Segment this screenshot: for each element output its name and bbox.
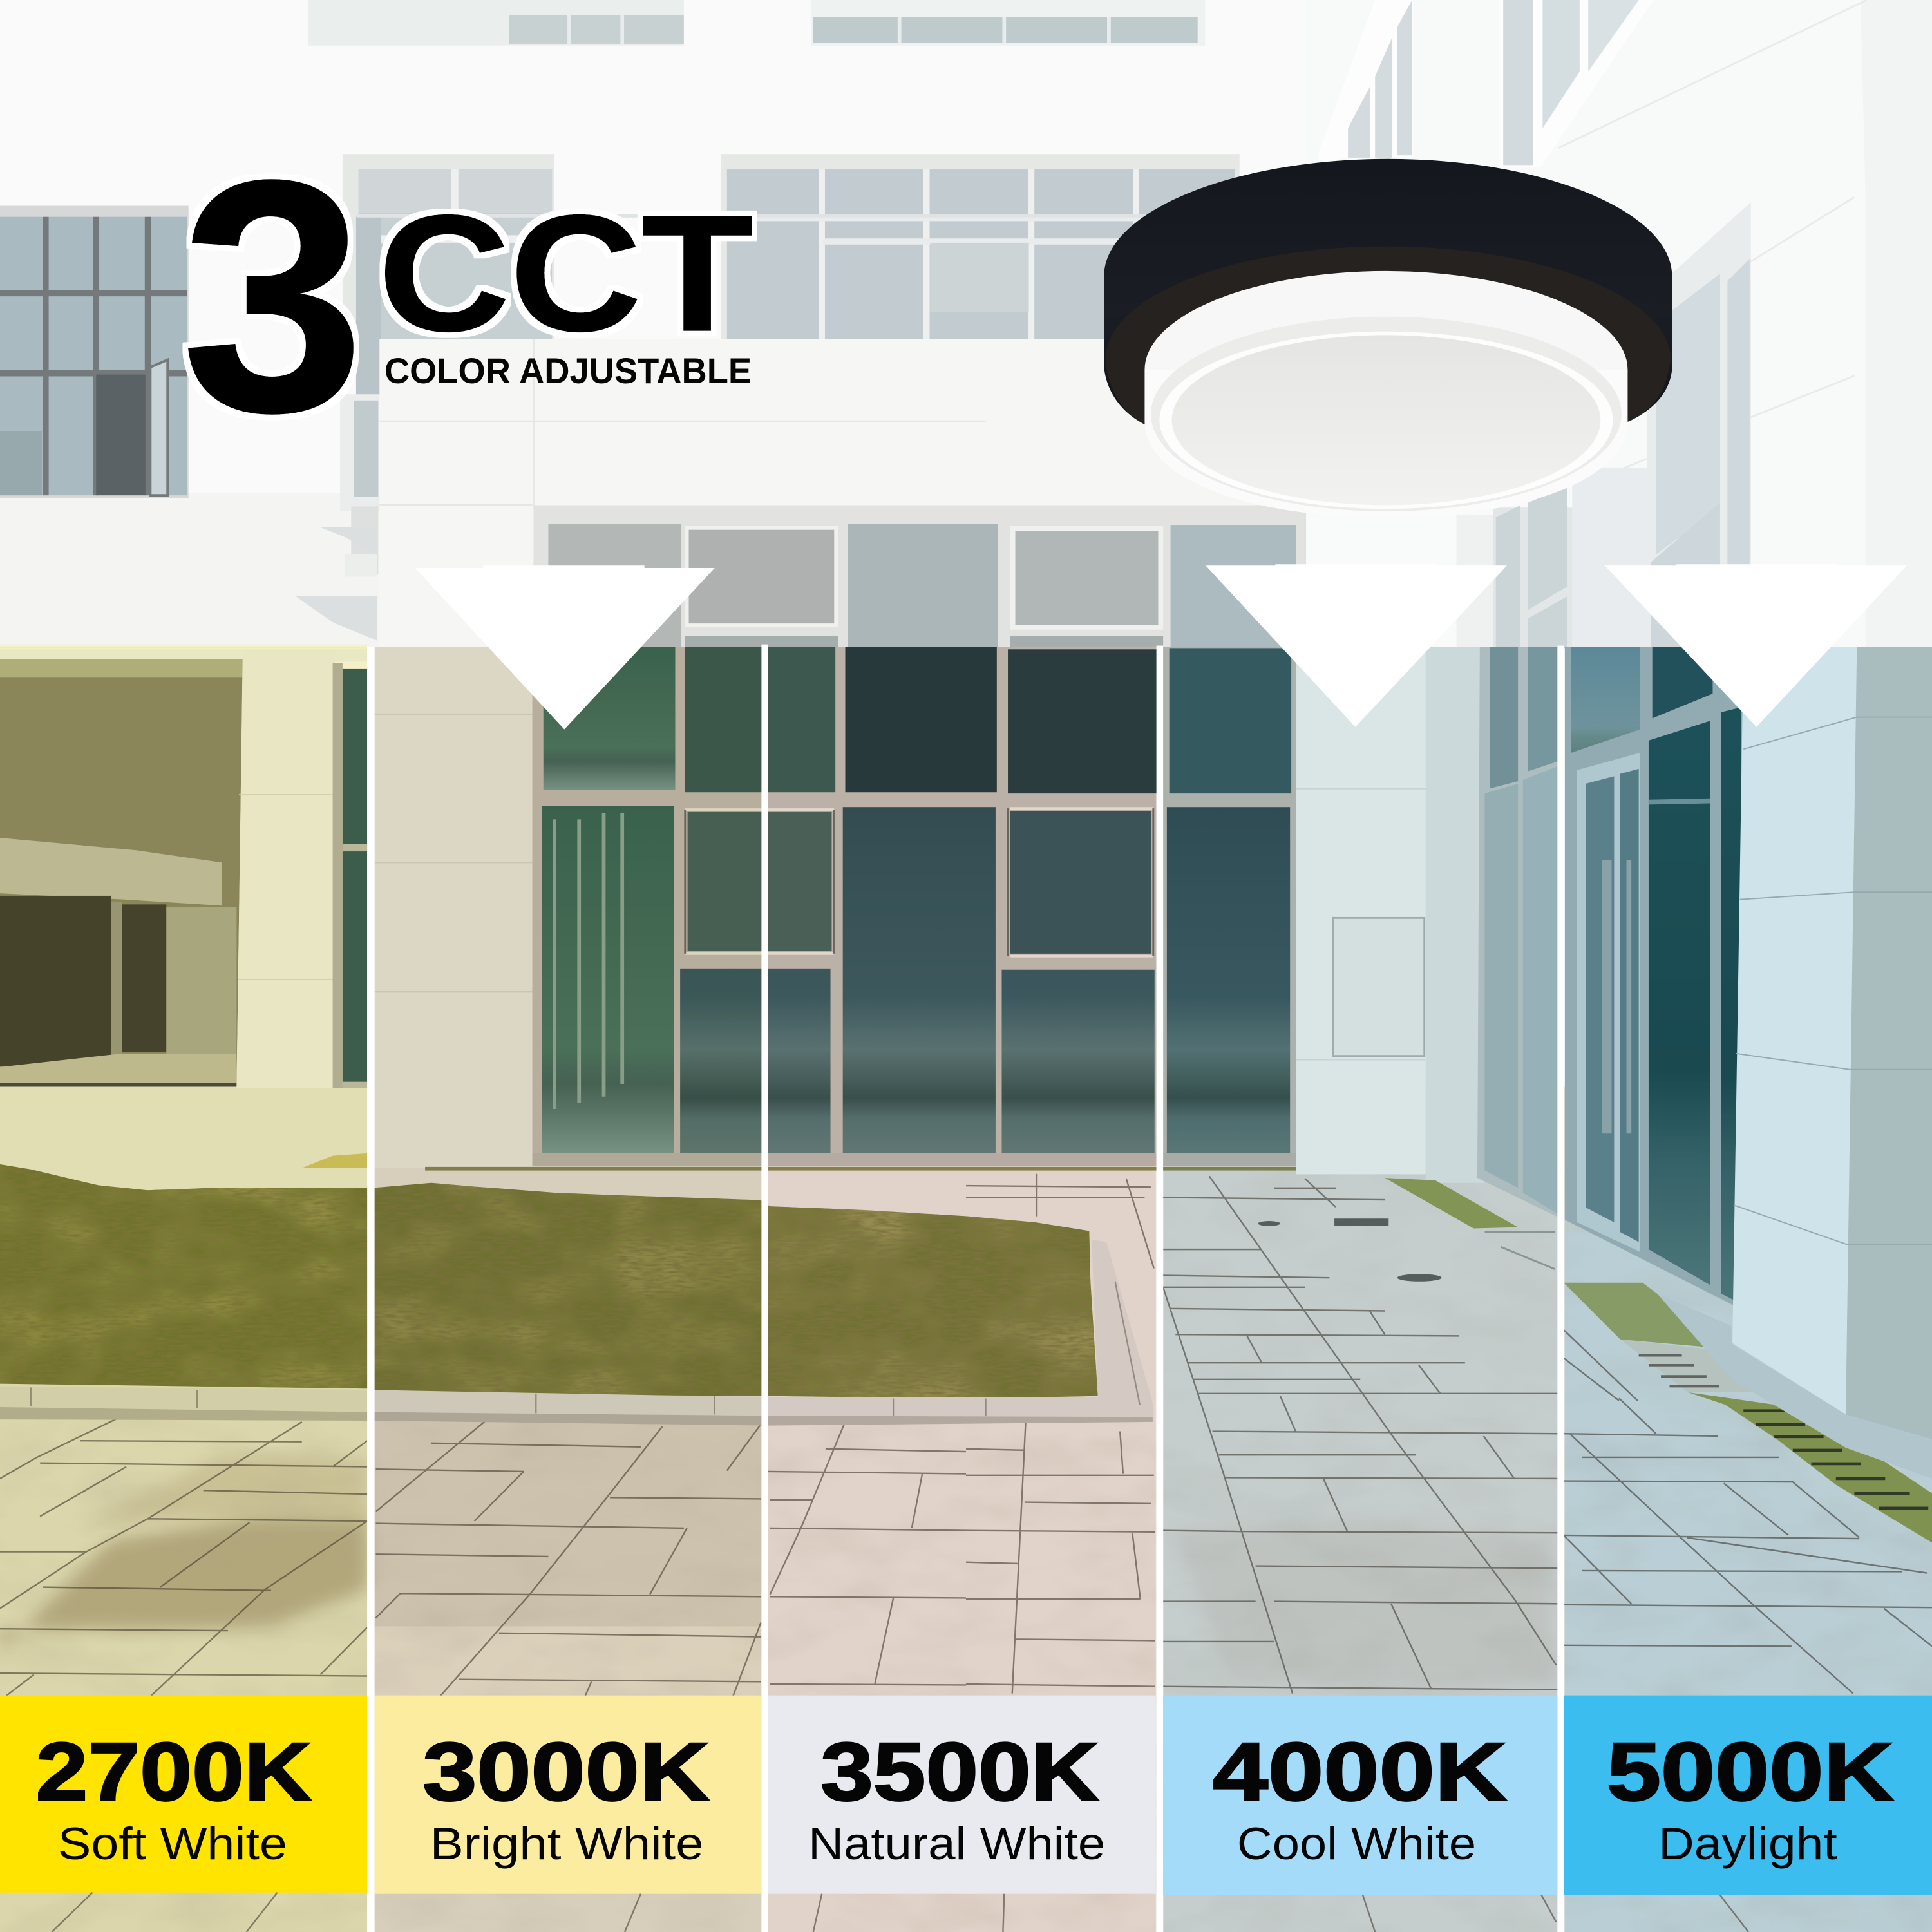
paving joint lines: centre and right pavers bbox=[966, 1174, 1932, 1694]
tint seam along 525 line bbox=[0, 645, 367, 648]
pillar bbox=[1732, 647, 1932, 1439]
white column divider 3 bbox=[1157, 646, 1163, 1932]
label: 4000K Cool White: Cool White bbox=[1237, 1819, 1476, 1870]
label: 3000K Bright White: Bright White bbox=[430, 1819, 703, 1870]
label: 3000K Bright White bbox=[375, 1696, 761, 1894]
paving joint lines: left pavers bbox=[0, 1415, 966, 1696]
label: 4000K Cool White: 4000K bbox=[1213, 1726, 1507, 1818]
fixture lens ring bbox=[1151, 317, 1622, 511]
recessed entrance in warm column bbox=[0, 649, 367, 1168]
label: 3500K Natural White: 3500K bbox=[820, 1726, 1099, 1818]
entrance door and teal windows bbox=[1565, 647, 1747, 1312]
label: 3000K Bright White: 3000K bbox=[422, 1726, 710, 1818]
pointer triangle: 4000K bbox=[1206, 564, 1507, 727]
lawn bbox=[0, 1164, 1098, 1399]
label: 2700K Soft White bbox=[0, 1696, 367, 1893]
label: 3500K Natural White bbox=[768, 1696, 1156, 1894]
label: 5000K Daylight: 5000K bbox=[1607, 1726, 1894, 1818]
window: upper centre-left bbox=[296, 154, 554, 641]
label: 5000K Daylight: Daylight bbox=[1658, 1819, 1837, 1870]
pointer triangle: 3000K bbox=[415, 565, 715, 730]
subtitle: COLOR ADJUSTABLE bbox=[384, 351, 752, 391]
fixture diffuser disc bbox=[1172, 335, 1600, 505]
title: 3 CCT bbox=[181, 111, 753, 480]
window: upper centre balcony bbox=[357, 154, 1240, 341]
fixture inner trim bbox=[1105, 247, 1671, 425]
right wall with utility panel bbox=[1296, 647, 1426, 1174]
right upper building bbox=[1306, 0, 1932, 648]
drainage strip near wall bbox=[1385, 1178, 1518, 1229]
bottom pavement joints below label bars bbox=[52, 1893, 1748, 1932]
colour temperature tint: 4000K column bbox=[1163, 647, 1557, 1932]
manhole covers bbox=[1258, 1218, 1442, 1282]
window: entrance upper panes bbox=[548, 524, 1296, 648]
numeral 3: 3 bbox=[181, 111, 365, 480]
utility panel bbox=[1333, 918, 1425, 1056]
CCT wordmark: CCT bbox=[378, 182, 753, 366]
white column divider 4 bbox=[1557, 646, 1564, 1932]
colour temperature tint: 3000K column bbox=[375, 647, 761, 1932]
colour temperature tint: 3500K column bbox=[768, 647, 1156, 1932]
lawn curb bbox=[0, 1240, 1153, 1426]
ceiling light fixture bbox=[1104, 159, 1672, 518]
white column divider 2 bbox=[761, 645, 768, 1932]
background: upper building facade bbox=[0, 0, 1932, 648]
fixture housing bbox=[1104, 159, 1672, 468]
column and side windows bbox=[1426, 647, 1564, 1220]
ground plane: pavement bbox=[0, 1087, 1932, 1932]
door handles bbox=[1604, 860, 1629, 1133]
label: 5000K Daylight bbox=[1564, 1696, 1932, 1895]
window: upper left bbox=[0, 206, 189, 498]
pointer triangle: 5000K bbox=[1605, 564, 1907, 727]
facade block above entrance bbox=[379, 339, 1316, 648]
fixture lens body bbox=[1144, 271, 1627, 468]
label: 3500K Natural White: Natural White bbox=[808, 1819, 1105, 1870]
entrance wall and glazing bbox=[375, 647, 1309, 1171]
drainage gratings bbox=[1484, 1232, 1932, 1542]
label: 2700K Soft White: 2700K bbox=[35, 1726, 312, 1818]
colour temperature tint: 2700K column bbox=[0, 647, 367, 1932]
white column divider 1 bbox=[367, 647, 375, 1932]
label: 2700K Soft White: Soft White bbox=[58, 1819, 287, 1870]
label: 4000K Cool White bbox=[1163, 1696, 1557, 1895]
colour temperature tint: 5000K column bbox=[1565, 647, 1932, 1932]
